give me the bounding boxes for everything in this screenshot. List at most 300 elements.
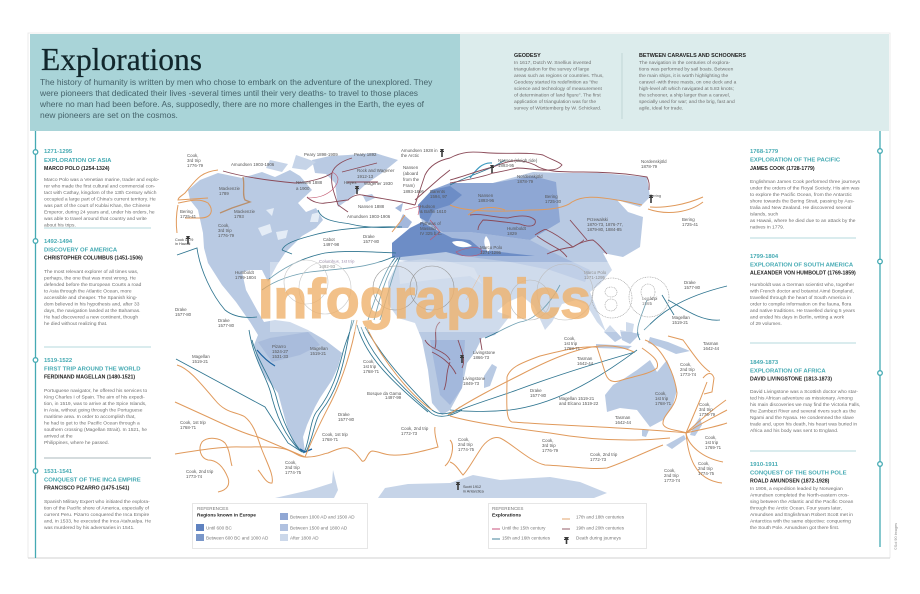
entry: Amundsen: the South Pole. Amundsen got there first. xyxy=(750,525,839,531)
map labels: Cook, xyxy=(187,153,198,158)
map labels: 1879-80, 1884-85 xyxy=(587,227,622,232)
entry: Amundsen: ROALD AMUNDSEN (1872-1928) xyxy=(750,478,830,484)
map labels: Drake xyxy=(530,388,542,393)
region: southern Africa xyxy=(430,340,465,405)
map labels: 1776-79 xyxy=(542,448,559,453)
map labels: Legázpi xyxy=(642,296,657,301)
entry: Magellan: FERDINAND MAGELLAN (1480-1521) xyxy=(44,374,135,380)
entry: Magellan: King Charles I of Spain. The aim of his expedi- xyxy=(44,394,145,400)
entry: Amundsen: Amundsen completed the North-eastern cros- xyxy=(750,492,849,498)
map labels: 1773-74 xyxy=(186,474,203,479)
routes: 17th and 18th centuries xyxy=(175,170,727,492)
entry: Pizarro: 1531-1541 xyxy=(44,469,73,475)
entry: Amundsen: In 1906, a expedition leaded by Norwegian xyxy=(750,486,843,492)
entry: James Cook: EXPLORATION OF THE PACIFIC xyxy=(750,158,841,164)
map labels: 2nd trip xyxy=(698,466,713,471)
icons: deaths during journeys: in Antarctica xyxy=(463,490,485,494)
map labels: 1519-21 xyxy=(310,351,327,356)
map labels: 3rd trip xyxy=(218,228,232,233)
map labels: 1776-79 xyxy=(187,163,204,168)
map labels: 1772-73 xyxy=(401,431,418,436)
map labels: Tasman xyxy=(703,341,719,346)
map labels: 1492-93 xyxy=(319,264,336,269)
map labels: Cook, xyxy=(285,460,296,465)
intro text: were pioneers that dedicated their lives -several times until their very deaths- to travel to those places xyxy=(39,88,418,98)
entry: Humboldt: order to compile information on the fauna, flora xyxy=(750,302,852,308)
map labels: 2nd trip xyxy=(680,367,695,372)
map labels: 1642-44 xyxy=(703,346,720,351)
legend: regions: Between 1000 AD and 1500 AD xyxy=(290,514,355,520)
entry: Amundsen: through the Arctic Ocean. Four years later, xyxy=(750,506,842,512)
map labels: the Arctic xyxy=(401,153,420,158)
credit: ©Sol 90 Images xyxy=(894,523,898,550)
entry: Marco Polo: tact with Cathay, kingdom of the 13th Century which xyxy=(44,190,157,196)
map labels: 1725-30 xyxy=(545,199,562,204)
entry: Amundsen: Amundsen and Englishman Robert Scott met in xyxy=(750,512,853,518)
map labels: Cook, 2nd trip xyxy=(590,452,618,457)
entry: Humboldt: EXPLORATION OF SOUTH AMERICA xyxy=(750,262,854,268)
entry: Pizarro: Spanish Military Expert who initiated the explora- xyxy=(44,499,150,505)
map labels: Nansen xyxy=(403,165,419,170)
text: between caravels and schooners: agile, ideal for trade. xyxy=(639,106,683,112)
map labels: Livingstone xyxy=(473,350,496,355)
map labels: 1912-13 xyxy=(357,174,374,179)
legend: regions: REFERENCES xyxy=(197,506,228,511)
map labels: 1893-95 xyxy=(498,163,515,168)
map labels: Massilia xyxy=(420,226,436,231)
entry: Magellan: southern crossing (Magellan Strait). In 1521, he xyxy=(44,427,147,433)
entry: Marco Polo: Emperor, during 24 years and, under his orders, he xyxy=(44,210,155,216)
map labels: 1773-74 xyxy=(680,372,697,377)
map labels: Bosque da Gama xyxy=(367,391,402,396)
map labels: 1497-98 xyxy=(323,242,340,247)
map labels: 1768-71 xyxy=(564,346,581,351)
entry: Livingstone: EXPLORATION OF AFRICA xyxy=(750,368,826,374)
entry: Columbus: DISCOVERY OF AMERICA xyxy=(44,248,118,254)
map labels: Rock and Wagener xyxy=(357,168,395,173)
map labels: 1774-75 xyxy=(458,447,475,452)
map labels: Columbus, 1st trip xyxy=(319,259,355,264)
entry: Pizarro: was murdered by his adversaries in 1541. xyxy=(44,525,135,531)
entry: Humboldt: and ended his days in Berlin, writing a work xyxy=(750,314,845,320)
map labels: Tasman xyxy=(577,356,593,361)
map labels: Peary 1898-1909 xyxy=(304,152,338,157)
map labels: 1776-79 xyxy=(699,412,716,417)
entry: James Cook: shore towards the Bering Strait, passing by Aus- xyxy=(750,198,855,204)
entry: Pizarro: CONQUEST OF THE INCA EMPIRE xyxy=(44,478,141,484)
map labels: Nordenskjöld xyxy=(641,159,667,164)
text: geodesy: science and technology of measurement xyxy=(514,86,602,92)
map labels: 1531-33 xyxy=(272,354,289,359)
legend: explorations: 19th and 20th centuries xyxy=(576,526,625,530)
region: Russia xyxy=(418,176,560,240)
text: between caravels and schooners: The navigation in the centuries of explora- xyxy=(639,60,730,66)
map labels: 1577-80 xyxy=(175,312,192,317)
routes: 15th and 16th centuries xyxy=(176,160,727,453)
map labels: Marco Polo xyxy=(584,270,607,275)
map labels: 1497-99 xyxy=(385,395,402,400)
entry: Humboldt: ALEXANDER VON HUMBOLDT (1769-1859) xyxy=(750,270,856,276)
map labels: Cook, xyxy=(699,402,710,407)
text: geodesy: GEODESY xyxy=(514,53,541,59)
text: geodesy: of determination of land figure". The first xyxy=(514,92,601,98)
entry: Magellan xyxy=(44,358,151,458)
routes: 19th and 20th centuries xyxy=(223,152,649,390)
map labels: 1577-80 xyxy=(363,239,380,244)
map labels: 2nd trip xyxy=(285,465,300,470)
map labels: Cabot xyxy=(323,237,335,242)
map labels: Tasman xyxy=(615,415,631,420)
seas xyxy=(400,205,490,252)
map labels: 3rd trip xyxy=(187,158,201,163)
text: between caravels and schooners: the schooner, a ship larger than a caravel, xyxy=(639,92,730,98)
region: South America interior xyxy=(258,332,320,362)
entry: Columbus: 1492-1494 xyxy=(44,239,73,245)
map labels: Cook, xyxy=(655,391,666,396)
map labels: Livingstone xyxy=(463,376,486,381)
entry: Humboldt: Humboldt was a German scientist who, together xyxy=(750,282,854,288)
entry: James Cook: natives in 1779. xyxy=(750,224,784,230)
entry: Marco Polo: occupied a large part of China's current territory. He xyxy=(44,196,156,202)
icons: deaths during journeys: Scott 1912 xyxy=(463,485,481,489)
map labels: 1774-75 xyxy=(698,471,715,476)
map labels: Peary 1892 xyxy=(354,152,377,157)
entry: Humboldt: and native traditions. He travelled during 5 years xyxy=(750,308,855,314)
entry: Livingstone: trade and, upon his death, his heart was buried in xyxy=(750,422,857,428)
map labels: Cook, xyxy=(680,362,691,367)
entry: Amundsen: CONQUEST OF THE SOUTH POLE xyxy=(750,470,847,476)
map labels: Drake xyxy=(218,318,230,323)
map labels: 1519-21 xyxy=(672,320,689,325)
entry: Pizarro: tion of the Pacific shore of America, especially of xyxy=(44,506,150,512)
legend: explorations: Until the 15th century xyxy=(502,526,546,530)
entry: Marco Polo: was able to travel around that country and write xyxy=(44,216,147,222)
map labels: Humboldt xyxy=(507,226,527,231)
text: between caravels and schooners: caravel -with three masts, on one deck and a xyxy=(639,80,737,86)
map labels: 1524-27 xyxy=(272,349,289,354)
legend: explorations: 17th and 18th centuries xyxy=(576,514,625,520)
map labels: (aboard xyxy=(403,171,419,176)
map labels: Hayes xyxy=(344,180,357,185)
entry: Columbus: The most relevant explorer of all times was, xyxy=(44,269,138,275)
map labels: 1271-1295 xyxy=(480,250,502,255)
map labels: IV 325 b.C. xyxy=(420,231,442,236)
map labels: Bering xyxy=(180,209,193,214)
map labels: 1769-71 xyxy=(705,445,722,450)
map labels: Hudson xyxy=(420,204,436,209)
map labels: 1866-73 xyxy=(473,355,490,360)
legend: explorations: 15th and 16th centuries xyxy=(502,536,551,540)
map labels: Drake xyxy=(363,234,375,239)
map labels: Amundsen 1903-1906 xyxy=(231,162,275,167)
entry: James Cook: to explore the Pacific Ocean, from the Antarctic xyxy=(750,192,852,198)
text: geodesy: In 1617, Dutch W. Snellius invented xyxy=(514,60,591,66)
map labels: Cook, xyxy=(564,336,575,341)
map labels: 1768-71 xyxy=(363,369,380,374)
region: central Asia xyxy=(442,232,590,282)
watermark: Infographics xyxy=(258,268,591,330)
world map xyxy=(175,148,727,498)
entry: Pizarro: current Peru. Pizarro conquered the Inca Empire xyxy=(44,512,149,518)
entry: James Cook: under the orders of the Royal Society. His aim was xyxy=(750,186,860,192)
map labels: 1577-80 xyxy=(218,323,235,328)
entry: Marco Polo: about his trips. xyxy=(44,222,76,228)
map labels: 1st trip xyxy=(564,341,578,346)
legend: regions: Between 600 BC and 1000 AD xyxy=(206,536,269,540)
map labels: 1642-44 xyxy=(577,361,594,366)
map labels: 3rd trip xyxy=(542,443,556,448)
entry: Magellan: Portuguese navigator, he offered his services to xyxy=(44,388,147,394)
legend: regions: After 1800 AD xyxy=(290,536,319,540)
map labels: a 1900 xyxy=(296,186,310,191)
map labels: 1725-41 xyxy=(682,222,699,227)
map labels: Bering xyxy=(682,217,695,222)
map labels: Pytheas of xyxy=(420,221,442,226)
entry: Marco Polo: Marco Polo was a Venetian marine, trader and explo- xyxy=(44,177,160,183)
map labels: Cook, xyxy=(218,223,229,228)
map labels: from the xyxy=(403,177,420,182)
text: geodesy: triangulation for the survey of large xyxy=(514,66,590,72)
panel: left column xyxy=(44,149,160,531)
entry: Columbus: to Asia through the Atlantic Ocean, more xyxy=(44,288,132,294)
routes: until the 15th century xyxy=(307,172,482,256)
map labels: 1893-1896 xyxy=(403,189,425,194)
entry: Magellan: FIRST TRIP AROUND THE WORLD xyxy=(44,366,141,372)
legend: explorations xyxy=(488,504,646,548)
map labels: 1849-73 xyxy=(463,381,480,386)
text: between caravels and schooners: tions was performed by sail boats. Between xyxy=(639,66,734,72)
map labels: Bering xyxy=(650,194,661,198)
entry: James Cook: JAMES COOK (1728-1779) xyxy=(750,166,815,172)
region: North Africa and Middle East xyxy=(398,259,482,284)
map labels: Amundsen 1928 in xyxy=(401,148,438,153)
entry: Pizarro: and, in 1533, he executed the Inca Atahualpa. He xyxy=(44,518,151,524)
map labels: 1768-71 xyxy=(180,425,197,430)
entry: Livingstone: DAVID LIVINGSTONE (1813-1873) xyxy=(750,376,832,382)
map labels: and Elcano 1519-22 xyxy=(559,401,599,406)
panel: header xyxy=(30,34,889,131)
text: geodesy: Geodesy started its redefinition as "the xyxy=(514,80,598,86)
map labels: Wagener 1930 xyxy=(364,181,393,186)
map labels: Cook, 2nd trip xyxy=(401,426,429,431)
entry: James Cook: islands, such xyxy=(750,212,779,218)
map labels: 1829 xyxy=(507,231,517,236)
entry: Columbus: he died without realizing that. xyxy=(44,321,107,327)
map labels: Przewalski xyxy=(587,217,608,222)
entry: Amundsen: 1910-1911 xyxy=(750,462,779,468)
map labels: 1565 xyxy=(642,301,652,306)
entry: Humboldt xyxy=(750,254,856,343)
map labels: 1642-44 xyxy=(615,420,632,425)
entry: Magellan: tion, in 1519, was to arrive at the Spice Islands, xyxy=(44,401,146,407)
entry: Magellan: 1519-1522 xyxy=(44,358,73,364)
entry: Pizarro xyxy=(44,469,151,531)
map labels: Magellan xyxy=(310,346,328,351)
map labels: Marco Polo xyxy=(480,245,503,250)
map labels: 1594, 97 xyxy=(430,194,448,199)
intro text: where no man had been before. As, supposedly, there are no more challenges in the Earth, the eyes of xyxy=(39,99,425,109)
entry: Magellan: in Asia, without going through the Portuguese xyxy=(44,408,143,414)
map labels: Cook, xyxy=(664,468,675,473)
map labels: Nansen 1888 xyxy=(358,204,385,209)
map labels: Nansen (sleigh ride) xyxy=(498,158,538,163)
entry: Livingstone: the Zambezi River and several rivers such as the xyxy=(750,408,856,414)
entry: Marco Polo: 1271-1295 xyxy=(44,149,73,155)
map labels: 1577-80 xyxy=(338,417,355,422)
map labels: Barents xyxy=(430,189,446,194)
map labels: 1725-41 xyxy=(180,214,197,219)
map labels: Drake xyxy=(338,412,350,417)
entry: Marco Polo: MARCO POLO (1254-1324) xyxy=(44,166,110,172)
map labels xyxy=(175,148,722,483)
map labels: 1st trip xyxy=(363,364,377,369)
map labels: Magellan xyxy=(672,315,690,320)
entry: James Cook: Englishman James Cook performed three journeys xyxy=(750,179,861,185)
icons: deaths during journeys: Cook 1779 xyxy=(175,238,193,242)
entry: Columbus: He had discovered a new continent, though xyxy=(44,314,138,320)
map labels: 1768-71 xyxy=(655,401,672,406)
region: Europe xyxy=(392,222,535,258)
entry: Marco Polo: rer who made the first cultural and commercial con- xyxy=(44,184,156,190)
entry: Pizarro: FRANCISCO PIZARRO (1475-1541) xyxy=(44,486,130,492)
entry: Columbus: dom believed in his hypothesis and, after 33 xyxy=(44,302,140,308)
map labels: Nansen 1888 xyxy=(296,180,323,185)
entry: Livingstone: David Livingstone was a Scottish doctor who star- xyxy=(750,389,858,395)
land masses xyxy=(188,153,702,498)
entry: Livingstone: Ngami and the Nyasa. He condemned the slave xyxy=(750,415,854,421)
title: Explorations xyxy=(41,42,202,77)
text: geodesy: areas such as regions or countries. Thus, xyxy=(514,73,604,79)
entry: Humboldt: of 29 volumes. xyxy=(750,321,782,327)
text: between caravels and schooners: specially used for war; and the brig, fast and xyxy=(639,99,735,105)
map labels: 1st trip xyxy=(655,396,669,401)
text: between caravels and schooners: the main ships, it is worth highlighting the xyxy=(639,73,728,79)
icons: deaths during journeys: in Hawaii xyxy=(175,242,191,246)
map labels: Magellan 1519-21 xyxy=(559,396,595,401)
map labels: 1577-80 xyxy=(684,285,701,290)
text: geodesy: application of triangulation was for the xyxy=(514,99,596,105)
map labels: 2nd trip xyxy=(458,442,473,447)
map labels: Cook, 1st trip xyxy=(322,432,348,437)
legend: explorations: Explorations xyxy=(492,512,521,518)
legend: regions: Regions known in Europe xyxy=(197,512,256,518)
entry: James Cook xyxy=(750,149,861,238)
map labels: 1789 xyxy=(219,191,229,196)
map labels: Nordenskjöld xyxy=(517,174,543,179)
icons: deaths during journeys xyxy=(175,149,653,494)
entry: Marco Polo: EXPLORATION OF ASIA xyxy=(44,158,112,164)
timeline right xyxy=(878,131,882,547)
map labels: 1st trip xyxy=(705,440,719,445)
entry: Magellan: Philippines, where he passed. xyxy=(44,440,109,446)
map labels: Mackenzie xyxy=(234,209,256,214)
entry: Humboldt: 1799-1804 xyxy=(750,254,779,260)
entry: Columbus: days, the navigation landed at the Bahamas. xyxy=(44,308,141,314)
entry: Livingstone: 1849-1873 xyxy=(750,360,779,366)
map labels: 1271-1295 xyxy=(584,275,606,280)
route: Mackenzie xyxy=(220,177,250,213)
map labels: Drake xyxy=(175,307,187,312)
map labels: Cook, xyxy=(458,437,469,442)
entry: Marco Polo: was part of the court of Kublai Khan, the Chinese xyxy=(44,203,151,209)
map labels: 2nd trip xyxy=(664,473,679,478)
entry: Livingstone: ted his African adventure as missionary. Among xyxy=(750,396,853,402)
intro text: The history of humanity is written by men who chose to embark on the adventure of the unexplored. They xyxy=(40,77,433,87)
map labels: Cook, xyxy=(542,438,553,443)
map labels: Cook, xyxy=(705,435,716,440)
text: between caravels and schooners: high-level aft which navigated at 5.83 knots; xyxy=(639,86,734,92)
entry: Columbus: defended before the European Courts a road xyxy=(44,282,142,288)
map labels: 1776-79 xyxy=(218,233,235,238)
map labels: 1878-79 xyxy=(641,164,658,169)
watermark xyxy=(258,260,669,332)
entry: Columbus: CHRISTOPHER COLUMBUS (1451-1506) xyxy=(44,256,143,262)
map labels: 1870-73, 1876-77, xyxy=(587,222,623,227)
map labels: Magellan xyxy=(192,354,210,359)
map labels: 1799-1804 xyxy=(235,275,257,280)
entry: Livingstone xyxy=(750,360,860,451)
map labels: Cook, xyxy=(698,461,709,466)
map labels: 1893-96 xyxy=(478,198,495,203)
map labels: Nansen xyxy=(478,193,494,198)
map labels: Fram) xyxy=(403,183,415,188)
legend: explorations: REFERENCES xyxy=(492,506,523,511)
entry: Amundsen xyxy=(750,462,854,531)
entry: Amundsen: Antarctica with the same objective: conquering xyxy=(750,518,851,524)
entry: Magellan: maritime area. In order to accomplish that, xyxy=(44,414,136,420)
map labels: 3rd trip xyxy=(699,407,713,412)
map labels: Cook, 1st trip xyxy=(180,420,206,425)
entry: Humboldt: travelled through the heart of South America in xyxy=(750,295,851,301)
text: geodesy: survey of Württemberg by W. Schickard. xyxy=(514,106,601,112)
map labels: Pizarro xyxy=(272,344,286,349)
map labels: & Baffin 1610 xyxy=(420,209,447,214)
map labels: Drake xyxy=(684,280,696,285)
map labels: Mackenzie xyxy=(219,186,241,191)
text: between caravels and schooners: BETWEEN CARAVELS AND SCHOONERS xyxy=(639,53,746,59)
map labels: 1774-75 xyxy=(285,470,302,475)
map labels: 1577-80 xyxy=(530,393,547,398)
timeline left xyxy=(33,131,38,558)
legend: regions: Between 1500 and 1800 AD xyxy=(290,526,348,530)
entry: Magellan: arrived at the xyxy=(44,434,73,440)
entry: Columbus xyxy=(44,239,151,347)
lakes xyxy=(258,208,320,240)
map labels: 1519-21 xyxy=(192,359,209,364)
entry: Humboldt: with French doctor and botanist Aimé Bonpland, xyxy=(750,288,854,294)
map labels: Amundsen 1903-1906 xyxy=(347,214,391,219)
legend: explorations: Death during journeys xyxy=(576,536,622,540)
map labels: 1773-74 xyxy=(664,478,681,483)
legend: regions xyxy=(192,504,368,548)
entry: Magellan: he had to get to the Pacific Ocean through a xyxy=(44,420,140,426)
entry: James Cook: 1768-1779 xyxy=(750,149,779,155)
legend: regions: Until 600 BC xyxy=(206,526,232,530)
entry: Livingstone: Africa and his body was sent to England. xyxy=(750,428,838,434)
panel: right column xyxy=(750,149,898,550)
map labels: 1768-71 xyxy=(322,437,339,442)
entry: James Cook: as Hawaii, where he died due to an attack by the xyxy=(750,218,856,224)
entry: Columbus: perhaps, the one that was most wrong. He xyxy=(44,276,136,282)
entry: Marco Polo xyxy=(44,149,160,228)
entry: Livingstone: his main discoveries we may find the Victoria Falls, xyxy=(750,402,860,408)
entry: Columbus: accessible and cheaper. The Spanish king- xyxy=(44,295,138,301)
entry: Amundsen: sing between the Atlantic and the Pacific Ocean xyxy=(750,499,854,505)
map labels: Cook, xyxy=(363,359,374,364)
map labels: 1878-79 xyxy=(517,179,534,184)
intro text: new pioneers are set on the cosmos. xyxy=(40,110,178,120)
map labels: 1793 xyxy=(234,214,244,219)
